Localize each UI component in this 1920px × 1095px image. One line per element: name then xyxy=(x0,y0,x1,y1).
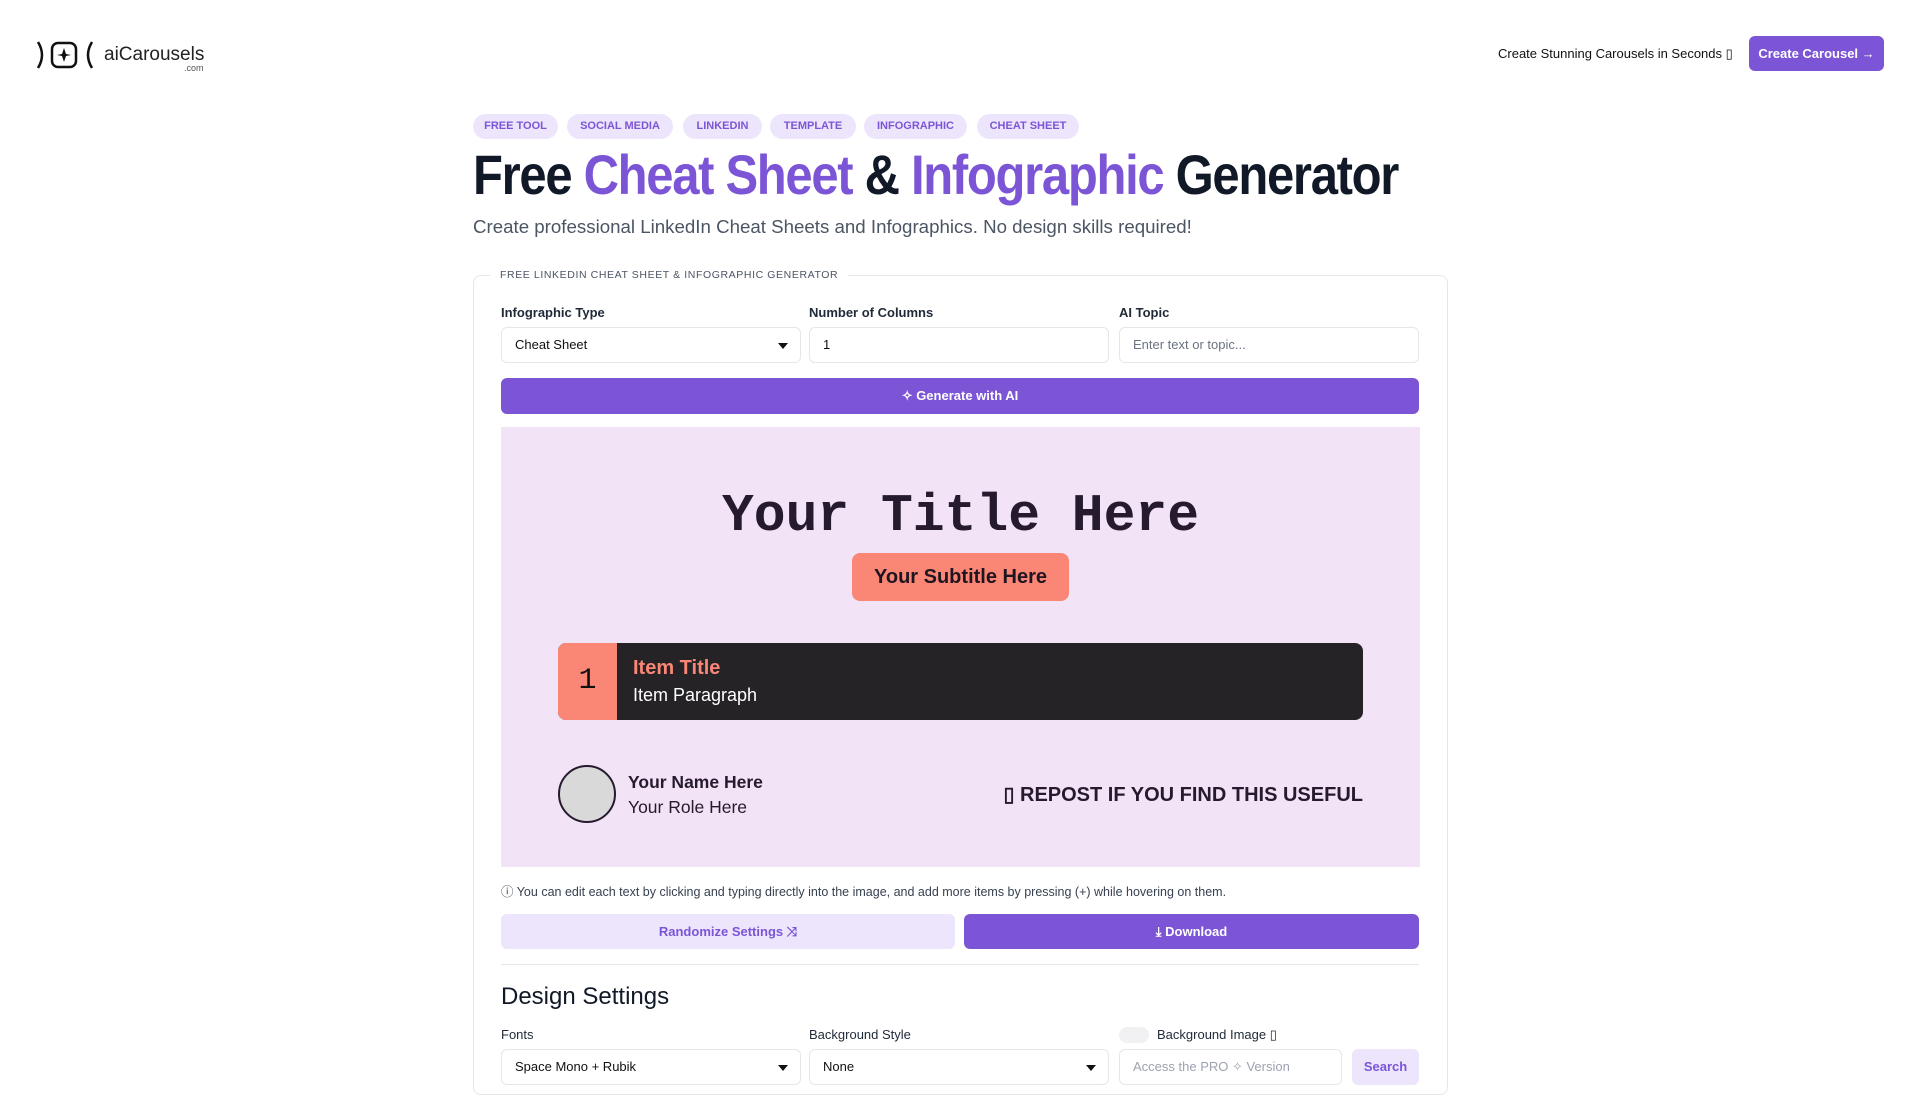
subtitle: Create professional LinkedIn Cheat Sheets and Infographics. No design skills required! xyxy=(473,216,1192,237)
panel: generator xyxy=(473,275,1448,1095)
author name: Your Name Here xyxy=(628,772,763,792)
item row: Item Title xyxy=(633,657,720,679)
tags: SOCIAL MEDIA xyxy=(580,120,660,132)
author name: Your Role Here xyxy=(628,797,747,817)
download button: ⤓ Download xyxy=(1156,924,1227,939)
header button: Create Carousel → xyxy=(1758,46,1875,61)
settings labels: Background Image ▯ xyxy=(1157,1027,1277,1042)
panel legend: FREE LINKEDIN CHEAT SHEET & INFOGRAPHIC GENERATOR xyxy=(500,269,838,281)
info note: ⓘ You can edit each text by clicking and typing directly into the image, and add more items by pressing (+) while hovering on them. xyxy=(501,885,1226,899)
input: infographic type xyxy=(501,327,801,363)
input: AI topic: Enter text or topic... xyxy=(1133,337,1246,352)
search button: Search xyxy=(1364,1059,1407,1074)
header tagline: Create Stunning Carousels in Seconds ▯ xyxy=(1498,46,1733,61)
repost callout: ▯ REPOST IF YOU FIND THIS USEFUL xyxy=(1003,784,1363,806)
randomize button xyxy=(501,914,955,949)
settings labels: Fonts xyxy=(501,1027,534,1042)
author avatar xyxy=(558,765,616,823)
tags: TEMPLATE xyxy=(784,120,842,132)
logo: aiCarousels xyxy=(104,44,204,65)
item row: 1 xyxy=(578,664,596,698)
title: Free Cheat Sheet & Infographic Generator xyxy=(473,143,1398,206)
subtitle pill: Your Subtitle Here xyxy=(874,566,1047,588)
tags: FREE TOOL xyxy=(484,120,547,132)
input: background style xyxy=(809,1049,1109,1085)
logo xyxy=(37,41,204,73)
preview title: Your Title Here xyxy=(722,486,1199,546)
input: AI topic xyxy=(1119,327,1419,363)
randomize button: Randomize Settings ⤨ xyxy=(659,924,797,939)
search button xyxy=(1352,1049,1419,1085)
author name xyxy=(628,772,763,817)
tags: INFOGRAPHIC xyxy=(877,120,954,132)
design settings heading: Design Settings xyxy=(501,983,669,1010)
generate button: ✧ Generate with AI xyxy=(902,388,1018,403)
input: pro xyxy=(1119,1049,1342,1085)
tags: LINKEDIN xyxy=(697,120,748,132)
tags xyxy=(473,114,1079,139)
input: pro: Access the PRO ✧ Version xyxy=(1133,1059,1290,1074)
form labels: Number of Columns xyxy=(809,305,933,320)
input: fonts: Space Mono + Rubik xyxy=(515,1059,636,1074)
download button xyxy=(964,914,1419,949)
tags: CHEAT SHEET xyxy=(990,120,1066,132)
input: infographic type: Cheat Sheet xyxy=(515,337,587,352)
header button xyxy=(1749,36,1884,71)
generate button xyxy=(501,378,1419,414)
form labels: Infographic Type xyxy=(501,305,605,320)
input: background style: None xyxy=(823,1059,854,1074)
logo: .com xyxy=(184,63,204,73)
settings labels: Background Style xyxy=(809,1027,911,1042)
form labels xyxy=(501,305,1169,320)
preview canvas xyxy=(501,427,1420,867)
input: fonts xyxy=(501,1049,801,1085)
item row xyxy=(558,643,1363,720)
input: columns: 1 xyxy=(823,337,830,352)
settings labels xyxy=(501,1027,1277,1043)
form labels: AI Topic xyxy=(1119,305,1169,320)
input: columns xyxy=(809,327,1109,363)
item row: Item Paragraph xyxy=(633,685,757,705)
subtitle pill xyxy=(852,553,1069,601)
